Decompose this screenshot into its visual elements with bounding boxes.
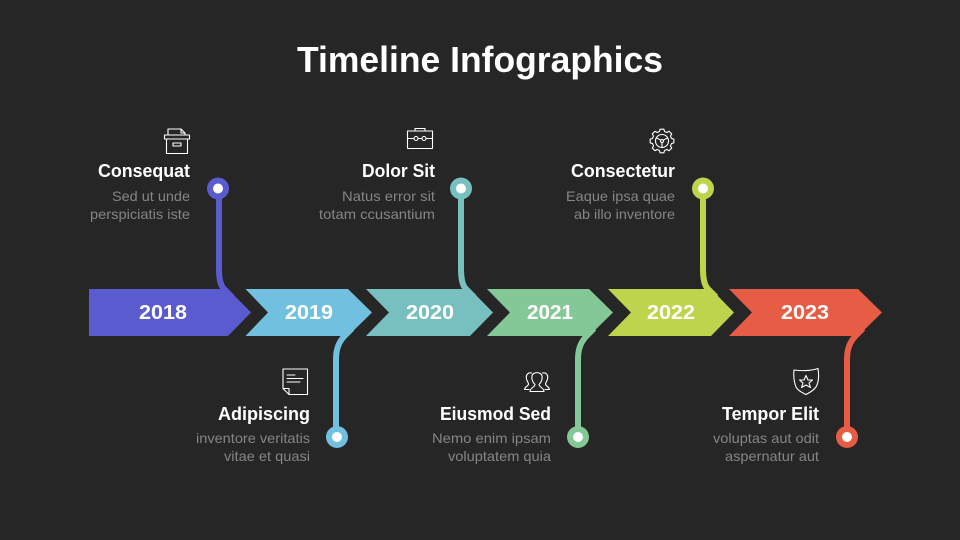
icon: gear bbox=[650, 129, 674, 153]
text: Consequat: Sed ut unde bbox=[112, 188, 190, 204]
text: Consequat: perspiciatis iste bbox=[90, 206, 190, 222]
connector and pin: 2020 bbox=[450, 178, 474, 297]
text: Dolor Sit: Natus error sit bbox=[342, 188, 435, 204]
text: Adipiscing bbox=[196, 404, 310, 464]
arrow: 2018 bbox=[89, 289, 251, 336]
text: Eiusmod Sed: Eiusmod Sed bbox=[440, 404, 551, 424]
text: Eiusmod Sed: voluptatem quia bbox=[448, 448, 551, 464]
icon: briefcase bbox=[408, 128, 432, 148]
text: Eiusmod Sed: Nemo enim ipsam bbox=[432, 430, 551, 446]
text: Tempor Elit bbox=[713, 404, 819, 464]
arrow: 2020: 2020 bbox=[406, 302, 454, 324]
arrow: 2023 bbox=[729, 289, 882, 336]
title: Timeline Infographics bbox=[297, 39, 663, 80]
icon: shield with star bbox=[794, 368, 819, 394]
text: Adipiscing: vitae et quasi bbox=[224, 448, 310, 464]
arrow: 2021 bbox=[487, 289, 613, 336]
text: Tempor Elit: Tempor Elit bbox=[722, 404, 819, 424]
icon: people bbox=[524, 373, 550, 392]
connector and pin: 2021 bbox=[567, 328, 594, 448]
text: Dolor Sit bbox=[319, 161, 435, 222]
arrow: 2023: 2023 bbox=[781, 302, 829, 324]
arrow: 2019: 2019 bbox=[285, 302, 333, 324]
arrow: 2020 bbox=[366, 289, 493, 336]
text: Dolor Sit: totam ccusantium bbox=[319, 206, 435, 222]
connector and pin: 2022 bbox=[692, 178, 716, 297]
icon: note bbox=[283, 369, 308, 394]
text: Tempor Elit: aspernatur aut bbox=[725, 448, 819, 464]
connector and pin: 2023 bbox=[836, 328, 863, 448]
arrow: 2022 bbox=[608, 289, 734, 336]
text: Consectetur bbox=[566, 161, 675, 222]
text: Tempor Elit: voluptas aut odit bbox=[713, 430, 819, 446]
text: Consequat bbox=[90, 161, 190, 222]
text: Consectetur: ab illo inventore bbox=[574, 206, 675, 222]
arrow: 2022: 2022 bbox=[647, 302, 695, 324]
text: Adipiscing: inventore veritatis bbox=[196, 430, 310, 446]
arrow: 2019 bbox=[246, 289, 372, 336]
icon: archive box bbox=[164, 129, 190, 154]
arrow: 2018: 2018 bbox=[139, 302, 187, 324]
connector and pin: 2019 bbox=[326, 328, 352, 448]
text: Dolor Sit: Dolor Sit bbox=[362, 161, 435, 181]
text: Consectetur: Eaque ipsa quae bbox=[566, 188, 675, 204]
text: Consequat: Consequat bbox=[98, 161, 190, 181]
text: Eiusmod Sed bbox=[432, 404, 551, 464]
text: Consectetur: Consectetur bbox=[571, 161, 675, 181]
connector and pin: 2018 bbox=[207, 178, 232, 297]
text: Adipiscing: Adipiscing bbox=[218, 404, 310, 424]
arrow: 2021: 2021 bbox=[527, 302, 573, 324]
